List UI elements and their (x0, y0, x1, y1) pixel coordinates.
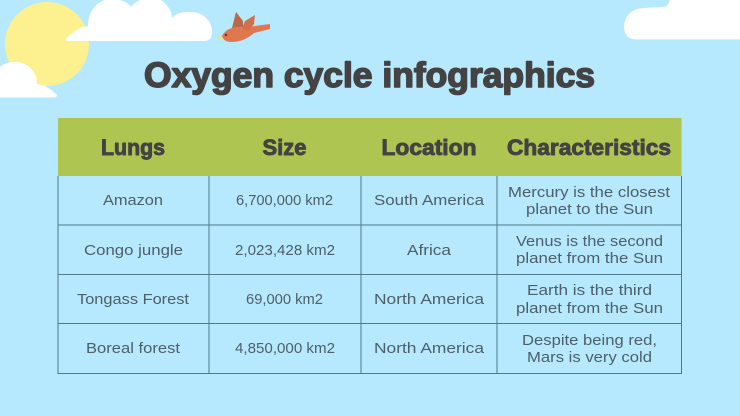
header: Location: Location (382, 135, 476, 160)
icon: cloud top right (624, 0, 740, 40)
row: Congo jungle: Congo jungle (84, 243, 183, 259)
row: Boreal forest: Mars is very cold (527, 350, 652, 366)
row: Tongass Forest: 69,000 km2 (246, 292, 323, 308)
row: Amazon (103, 185, 670, 218)
table grid (58, 176, 682, 374)
header: Lungs: Lungs (101, 135, 165, 160)
title: Oxygen cycle infographics (144, 56, 595, 95)
row: Tongass Forest: North America (374, 292, 485, 308)
row: Congo jungle: planet from the Sun (516, 251, 663, 267)
icon: bird (216, 12, 270, 42)
row: Amazon: planet to the Sun (526, 202, 653, 218)
row: Congo jungle: 2,023,428 km2 (235, 243, 335, 259)
row: Boreal forest (86, 333, 657, 366)
row: Congo jungle (84, 234, 663, 267)
row: Tongass Forest: Tongass Forest (77, 292, 189, 308)
header: Characteristics: Characteristics (507, 135, 671, 160)
row: Boreal forest: North America (374, 341, 485, 357)
row: Boreal forest: 4,850,000 km2 (235, 341, 335, 357)
icon: large cloud top (66, 0, 212, 41)
row: Congo jungle: Venus is the second (516, 234, 663, 250)
row: Congo jungle: Africa (407, 243, 452, 259)
row: Boreal forest: Despite being red, (522, 333, 657, 349)
row: Amazon: 6,700,000 km2 (236, 193, 333, 209)
row: Tongass Forest (77, 283, 663, 317)
row: Tongass Forest: Earth is the third (527, 283, 652, 299)
row: Amazon: Mercury is the closest (508, 185, 670, 201)
row: Boreal forest: Boreal forest (86, 341, 180, 357)
row: Tongass Forest: planet from the Sun (516, 301, 663, 317)
icon: small cloud left (0, 62, 57, 98)
table (58, 118, 682, 374)
header: Size: Size (262, 135, 306, 160)
row: Amazon: Amazon (103, 193, 163, 209)
icon: sun (5, 2, 89, 86)
table header band (58, 118, 682, 176)
row: Amazon: South America (374, 193, 485, 209)
